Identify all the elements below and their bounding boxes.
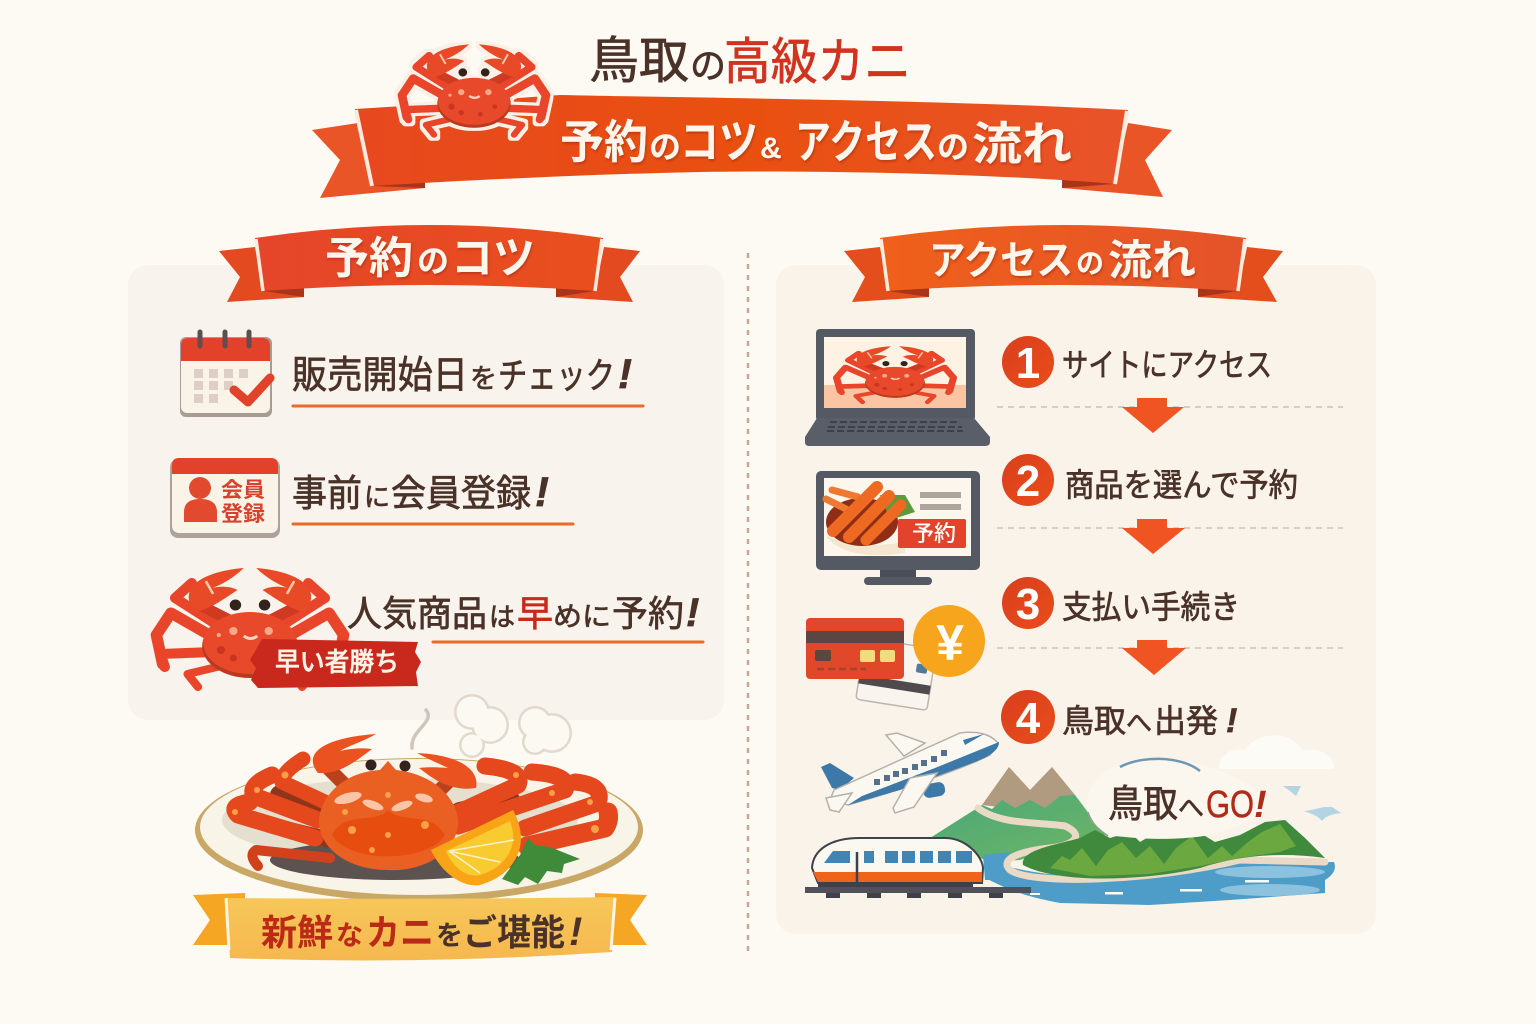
speech bubble xyxy=(1087,758,1267,839)
crab claws xyxy=(313,734,477,789)
lemon xyxy=(431,810,521,885)
panel: left background xyxy=(128,265,724,720)
ribbon heading: access flow: アクセス xyxy=(929,239,1073,283)
banner: enjoy fresh crab: な xyxy=(336,921,363,951)
step 4: へ xyxy=(1126,708,1152,738)
ribbon heading: reservation tips: コツ xyxy=(451,234,535,283)
speech bubble: ! xyxy=(1254,784,1267,826)
ribbon heading text: & xyxy=(760,132,782,165)
ribbon heading: reservation tips xyxy=(219,225,640,302)
step 4: 4 xyxy=(1016,694,1041,743)
tip 3 text: めに xyxy=(553,602,611,632)
green hill xyxy=(930,795,1105,862)
tag: 早い者勝ち xyxy=(275,647,399,677)
icon: title crab xyxy=(402,44,546,135)
water xyxy=(985,860,1335,905)
ribbon heading: access flow: の xyxy=(1076,248,1104,279)
icon: credit cards and yen coin: ¥ xyxy=(936,615,964,671)
icon: crab with early bird tag xyxy=(156,568,421,688)
ribbon heading: access flow xyxy=(844,225,1283,302)
tip 2 text: 会員登録 xyxy=(391,473,531,514)
icon: calendar xyxy=(180,332,272,417)
ribbon heading text: の xyxy=(937,129,969,165)
main title ribbon xyxy=(312,95,1172,198)
step 4: 鳥取 xyxy=(1062,703,1126,739)
step 2: 2 xyxy=(1016,457,1040,506)
tip 3 text: は xyxy=(489,602,515,632)
central dashed divider xyxy=(747,253,749,952)
illustration: travel scene xyxy=(805,732,1341,905)
birds xyxy=(1283,786,1341,821)
ribbon heading: access flow: 流れ xyxy=(1108,237,1196,284)
step 3: 支払い手続き xyxy=(1062,589,1240,625)
icon: monitor with booking xyxy=(816,471,980,585)
tip 3 text: 人気商品 xyxy=(347,593,487,634)
title line: 高級カニ xyxy=(724,34,911,90)
speech bubble: へ xyxy=(1178,793,1204,823)
ribbon heading: reservation tips: 予約 xyxy=(325,234,413,283)
speech bubble: 鳥取 xyxy=(1108,784,1178,826)
icon: member card: 登録 xyxy=(221,503,265,526)
underline xyxy=(293,522,573,526)
divider with arrow 2 xyxy=(997,519,1343,554)
ribbon heading text: 流れ xyxy=(972,118,1072,170)
ribbon heading text xyxy=(560,116,1072,170)
ribbon heading text: コツ xyxy=(680,116,758,168)
divider with arrow 3 xyxy=(997,640,1343,675)
tip 2 text xyxy=(292,468,573,524)
leg spots xyxy=(232,772,599,833)
ribbon heading: reservation tips: の xyxy=(417,243,449,279)
title line: の xyxy=(690,45,726,86)
forest xyxy=(1023,820,1325,879)
banner: enjoy fresh crab xyxy=(193,893,647,960)
step 2 xyxy=(1002,454,1298,506)
banner: enjoy fresh crab: ご堪能 xyxy=(463,912,565,953)
ribbon heading text: 予約 xyxy=(560,116,648,168)
icon: laptop xyxy=(805,329,990,446)
garnish leaf xyxy=(502,838,580,885)
forest highlights xyxy=(1050,824,1296,876)
plate xyxy=(195,758,643,902)
tip 1 text: チェック xyxy=(498,355,615,396)
tip 1 text: 販売開始日 xyxy=(292,355,468,397)
tip 1 text: ! xyxy=(618,350,632,397)
step 1: 1 xyxy=(1016,339,1040,388)
step 1: サイトにアクセス xyxy=(1062,347,1272,383)
banner: enjoy fresh crab: 新鮮 xyxy=(261,912,333,953)
tip 2 text: に xyxy=(364,482,390,512)
tip 2 text: 事前 xyxy=(292,473,362,514)
icon: member card: 会員 xyxy=(221,479,265,502)
tip 3 text xyxy=(347,591,703,642)
banner: enjoy fresh crab: を xyxy=(436,921,463,951)
road xyxy=(978,808,1325,879)
step 3: 3 xyxy=(1016,580,1040,629)
mountains xyxy=(982,767,1085,815)
icon: monitor with booking: 予約 xyxy=(912,521,956,546)
tip 3 text: ! xyxy=(686,591,699,635)
tip 3 text: 予約 xyxy=(612,593,684,634)
banner: enjoy fresh crab: カニ xyxy=(366,912,434,953)
steam xyxy=(412,694,572,758)
train xyxy=(805,838,1031,898)
underline xyxy=(293,404,643,408)
step 1 xyxy=(1002,336,1272,388)
airplane xyxy=(821,732,999,813)
underline xyxy=(433,640,703,644)
speech bubble: GO xyxy=(1206,784,1254,826)
divider with arrow 1 xyxy=(997,398,1343,433)
lake bay xyxy=(983,852,1010,880)
step 2: 商品を選んで予約 xyxy=(1065,467,1298,503)
cloud xyxy=(1219,735,1334,769)
crab shell xyxy=(319,761,458,870)
crab eyes xyxy=(366,760,410,772)
illustration: crab on plate xyxy=(195,694,643,902)
banner: enjoy fresh crab: ! xyxy=(569,910,582,954)
tip 1 text: を xyxy=(470,364,497,394)
panel: right background xyxy=(776,265,1376,934)
tip 1 text xyxy=(292,350,643,406)
title line: 鳥取 xyxy=(589,33,689,89)
tag xyxy=(250,639,421,688)
icon: credit cards and yen coin xyxy=(806,605,985,710)
ribbon heading text: アクセス xyxy=(795,116,937,168)
step 4: ! xyxy=(1226,702,1237,740)
icon: member card xyxy=(170,458,280,538)
crab legs xyxy=(235,759,609,866)
ribbon heading text: の xyxy=(649,129,681,165)
step 3 xyxy=(1002,577,1240,629)
water highlights xyxy=(1215,866,1325,896)
title line xyxy=(589,33,911,90)
tip 3 text: 早 xyxy=(517,593,553,634)
step 4: 出発 xyxy=(1154,703,1218,739)
tip 2 text: ! xyxy=(535,468,549,515)
step 4 xyxy=(1001,690,1237,744)
